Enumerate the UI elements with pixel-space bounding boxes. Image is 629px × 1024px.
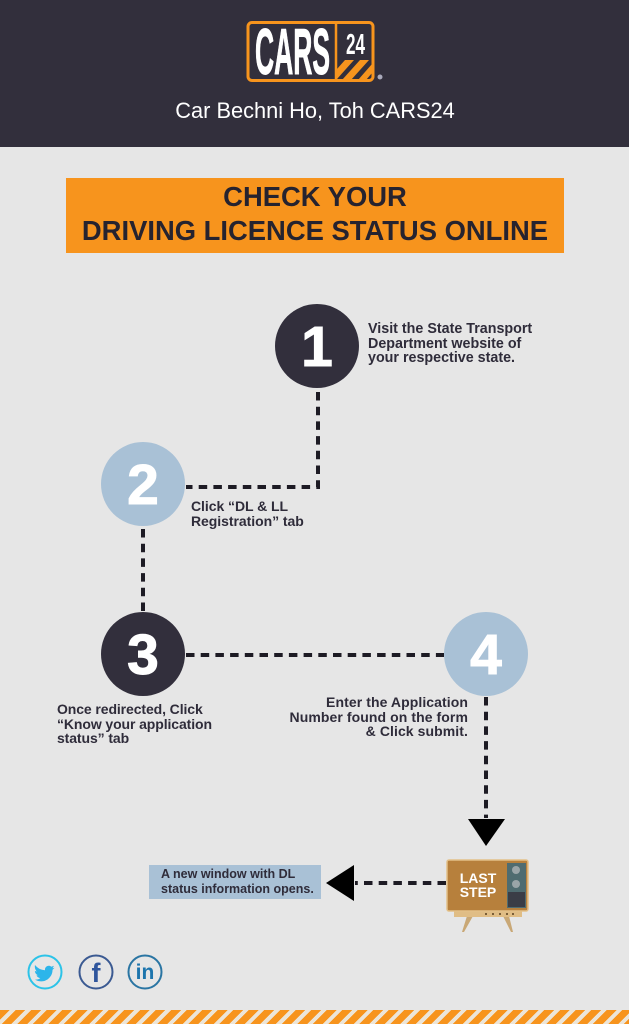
bottom hazard stripe bbox=[0, 1010, 629, 1024]
tagline: Car Bechni Ho, Toh CARS24 bbox=[175, 98, 455, 123]
icon: linkedin bbox=[128, 954, 162, 990]
step 4 text: Enter the Application bbox=[326, 694, 468, 710]
step 1 text: Visit the State Transport bbox=[368, 321, 532, 337]
step 4 text bbox=[290, 694, 468, 739]
step 3 text bbox=[57, 701, 212, 746]
title banner: CHECK YOUR bbox=[223, 181, 407, 212]
step 3 circle: 3 bbox=[127, 623, 159, 687]
last step text box: A new window with DL bbox=[161, 867, 295, 881]
step 2 circle: 2 bbox=[127, 453, 159, 517]
step 4 circle: 4 bbox=[470, 623, 502, 687]
icon: linkedin: in bbox=[136, 961, 154, 984]
icon: facebook bbox=[78, 954, 114, 990]
step 3 circle bbox=[101, 612, 185, 696]
step 3 text: “Know your application bbox=[57, 716, 212, 732]
step 3 text: Once redirected, Click bbox=[57, 701, 203, 717]
step 4 circle bbox=[444, 612, 528, 696]
step 2 circle bbox=[101, 442, 185, 526]
title banner: DRIVING LICENCE STATUS ONLINE bbox=[82, 215, 548, 246]
step 1 text: Department website of bbox=[368, 336, 521, 352]
last step text box bbox=[149, 865, 321, 899]
step 2 text: Click “DL & LL bbox=[191, 498, 288, 514]
step 4 text: & Click submit. bbox=[366, 723, 468, 739]
step 1 text: your respective state. bbox=[368, 350, 515, 366]
logo: 24 bbox=[346, 29, 365, 61]
step 1 circle bbox=[275, 304, 359, 388]
step 2 text bbox=[191, 498, 304, 529]
icon: facebook: f bbox=[92, 958, 102, 988]
last step text box: status information opens. bbox=[161, 882, 314, 896]
header band bbox=[0, 0, 629, 147]
last step TV icon bbox=[446, 859, 529, 932]
step 1 text bbox=[368, 321, 532, 366]
step 1 circle: 1 bbox=[301, 315, 333, 379]
last step TV icon: STEP bbox=[460, 884, 496, 900]
step 2 text: Registration” tab bbox=[191, 512, 304, 528]
step 3 text: status” tab bbox=[57, 730, 129, 746]
icon: twitter bbox=[28, 954, 62, 990]
last step TV icon: LAST bbox=[460, 870, 497, 886]
step 4 text: Number found on the form bbox=[290, 708, 468, 724]
title banner bbox=[66, 178, 564, 253]
